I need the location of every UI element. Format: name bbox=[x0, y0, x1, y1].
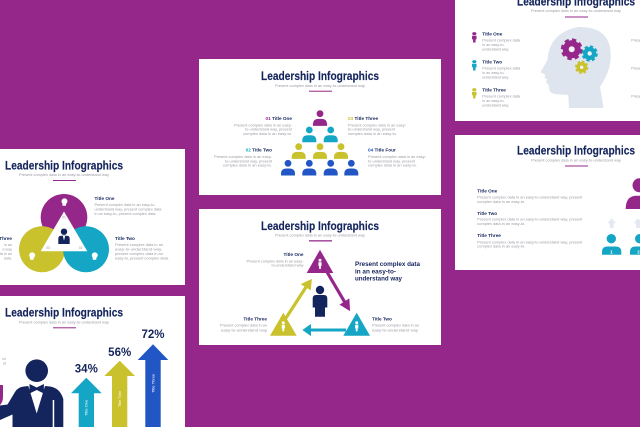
text: title three: ta in an bbox=[0, 252, 12, 256]
arrow: 72% bbox=[138, 329, 168, 427]
text: title two bbox=[115, 236, 169, 260]
subtitle: Present complex data in an easy-to-understand way bbox=[531, 158, 621, 162]
text: title three bbox=[0, 236, 12, 260]
text fragment bbox=[2, 357, 6, 366]
arrow: teal bbox=[305, 327, 346, 333]
text: title two: to-understand way, present bbox=[225, 159, 272, 163]
icon: teal gear bbox=[583, 46, 597, 60]
heading: Leadership Infographics bbox=[261, 219, 379, 233]
arrow: 34%: Title One bbox=[84, 399, 89, 416]
subtitle: Present complex data in an easy-to-understand way bbox=[275, 234, 365, 238]
text: title one: Present complex data in an easy-to-understand way, present bbox=[477, 195, 582, 199]
text: title three: complex data in an easy-to. bbox=[348, 132, 397, 136]
text: title three: Title Three bbox=[477, 233, 501, 238]
title rule bbox=[309, 240, 332, 242]
subtitle: Present complex data in an easy-to-understand way bbox=[19, 320, 109, 324]
icon: teal person one bbox=[602, 234, 621, 255]
icon: head silhouette bbox=[541, 27, 611, 108]
panel: triangle cycle bbox=[199, 209, 441, 345]
icon: pale arrows bbox=[607, 218, 640, 228]
text: title two: easy-to, present complex data. bbox=[115, 256, 169, 260]
icon: teal person one: 1 bbox=[610, 249, 613, 254]
item: title one: in an easy-to- bbox=[482, 43, 505, 47]
text: title one: Present complex data in an easy- bbox=[246, 259, 304, 263]
text: title four: to-understand way, present bbox=[368, 159, 415, 163]
callout bbox=[355, 261, 421, 283]
text: title three: complex data in an easy-to. bbox=[477, 245, 525, 249]
arrow: 72%: Title Three bbox=[150, 373, 155, 393]
item: title one: Present complex data bbox=[482, 39, 521, 43]
icon: manager bbox=[58, 228, 70, 244]
title rule bbox=[309, 91, 332, 92]
text: title one: Title One bbox=[284, 252, 304, 257]
text: title one bbox=[94, 196, 162, 216]
text: title three bbox=[477, 233, 582, 249]
text: title three: data. bbox=[4, 256, 12, 260]
venn circles: 01 bbox=[62, 216, 66, 220]
title rule bbox=[565, 166, 588, 167]
heading: Leadership Infographics bbox=[261, 69, 379, 83]
triangle: teal bbox=[343, 313, 370, 336]
text fragment: ch bbox=[2, 357, 6, 361]
text: title one: complex data in an easy-to. bbox=[477, 200, 525, 204]
item: title two: in an easy-to- bbox=[482, 71, 505, 75]
panel: hierarchy list bbox=[455, 135, 640, 270]
panel: percentage arrows bbox=[0, 296, 185, 427]
item: title three: understand way. bbox=[482, 104, 509, 108]
text: title one: in an easy-to, present complex data. bbox=[94, 212, 156, 216]
text: title two: Title Two bbox=[477, 211, 497, 216]
text: title two: present complex data in an bbox=[115, 252, 163, 256]
icon: yellow gear bbox=[576, 62, 588, 73]
text: title two: Present complex data in an easy-to-understand way, present bbox=[477, 218, 582, 222]
item: title two: Present complex data bbox=[482, 67, 521, 71]
icon: purple gear bbox=[562, 40, 581, 59]
text: title four bbox=[368, 148, 427, 168]
subtitle: Present complex data in an easy-to-understand way bbox=[531, 9, 621, 13]
arrow: 56%: 56% bbox=[108, 347, 131, 359]
text: title one bbox=[477, 188, 582, 204]
callout: understand way bbox=[355, 276, 403, 283]
icon: central person bbox=[313, 286, 327, 317]
text: title two: easy-to-understand way, bbox=[115, 248, 162, 252]
text: title three bbox=[348, 116, 407, 136]
text: title one: Present complex data in an easy- bbox=[234, 123, 293, 127]
text: title two: complex data in an easy-to. bbox=[477, 222, 525, 226]
icon: man in tuxedo bbox=[0, 359, 63, 427]
text: title three: Present complex data in an bbox=[220, 324, 267, 328]
arrow: yellow bbox=[286, 282, 310, 318]
arrow: purple bbox=[327, 272, 348, 308]
text: title three: Title Three bbox=[243, 316, 267, 321]
text: title one bbox=[246, 252, 304, 268]
text: title two bbox=[372, 316, 419, 332]
arrow: 56% bbox=[104, 347, 135, 427]
item: title two: understand way. bbox=[482, 76, 509, 80]
text: title three bbox=[220, 316, 267, 332]
triangle: purple bbox=[307, 250, 333, 273]
text: title two: Present complex data in an easy- bbox=[214, 155, 273, 159]
text: title four: complex data in an easy-to. bbox=[368, 164, 417, 168]
text: title one: complex data in an easy-to. bbox=[243, 132, 292, 136]
item: title three: Present complex data bbox=[482, 95, 521, 99]
arrow: 34%: 34% bbox=[75, 364, 98, 376]
item: title three: Title Three bbox=[482, 88, 506, 93]
icon: glass held by man bbox=[0, 385, 3, 405]
panel: head with gears bbox=[455, 0, 640, 121]
text: title two: complex data in an easy-to. bbox=[223, 164, 272, 168]
venn circles bbox=[19, 194, 109, 272]
callout: Present complex data bbox=[355, 261, 421, 268]
text: title one: to-understand way, present bbox=[245, 128, 292, 132]
text: title two: 02 Title Two bbox=[246, 148, 272, 152]
heading: Leadership Infographics bbox=[5, 305, 123, 319]
icon: purple leader bbox=[626, 178, 640, 209]
subtitle: Present complex data in an easy-to-understand way bbox=[19, 173, 109, 177]
title rule bbox=[53, 180, 76, 181]
title rule bbox=[565, 16, 588, 18]
item: title two: Title Two bbox=[482, 60, 502, 65]
arrow: 72%: 72% bbox=[141, 329, 165, 341]
text: title two bbox=[477, 211, 582, 226]
text: title three: 03 Title Three bbox=[348, 116, 379, 121]
text: title three: easy-to-understand way bbox=[221, 328, 267, 332]
panel: pyramid of people bbox=[199, 59, 441, 195]
item: title two bbox=[472, 60, 521, 80]
item: title one bbox=[472, 32, 521, 51]
callout: in an easy-to- bbox=[355, 268, 396, 276]
text: title two: Title Two bbox=[372, 316, 392, 321]
venn circles: 02 bbox=[79, 246, 83, 250]
heading: Leadership Infographics bbox=[5, 158, 123, 172]
text: title three: in an bbox=[4, 243, 12, 247]
item: title one: understand way. bbox=[482, 47, 509, 51]
text: title one: understand way, present complex data bbox=[94, 208, 162, 212]
text: title one: Title One bbox=[94, 196, 115, 201]
text fragment: ot bbox=[3, 362, 6, 366]
text: title two: Present complex data in an bbox=[115, 243, 163, 247]
text: title three: d way bbox=[2, 248, 12, 252]
text: title three: to-understand way, present bbox=[348, 128, 395, 132]
text fragments: right column bbox=[631, 39, 640, 99]
arrow: 34% bbox=[71, 364, 102, 427]
text: title one: to-understand way bbox=[272, 264, 304, 268]
arrow: 56%: Title Two bbox=[117, 390, 122, 407]
icon: teal person two bbox=[630, 234, 640, 255]
text: title three: Present complex data in an easy-to-understand way, present bbox=[477, 240, 582, 244]
panel: venn diagram bbox=[0, 149, 185, 285]
text: title four: 04 Title Four bbox=[368, 148, 396, 152]
text: title three: Present complex data in an easy- bbox=[348, 123, 407, 127]
text: title two bbox=[214, 148, 273, 168]
subtitle: Present complex data in an easy-to-understand way bbox=[275, 84, 365, 88]
text: title two: Title Two bbox=[115, 236, 135, 241]
item: title one: Title One bbox=[482, 32, 503, 37]
item: title three bbox=[472, 88, 521, 108]
text: title two: Present complex data in an bbox=[372, 324, 419, 328]
triangle: yellow bbox=[270, 313, 297, 336]
text: title one: Title One bbox=[477, 188, 498, 193]
text: title four: Present complex data in an easy- bbox=[368, 155, 427, 159]
text: title two: easy-to-understand way bbox=[372, 328, 418, 332]
item: title three: in an easy-to- bbox=[482, 99, 505, 103]
venn circles: 03 bbox=[46, 246, 50, 250]
people pyramid bbox=[281, 110, 358, 176]
title rule bbox=[53, 327, 76, 328]
text: title one bbox=[234, 116, 293, 136]
text: title one: Present complex data in an easy-to- bbox=[94, 203, 156, 207]
text: title one: 01 Title One bbox=[266, 116, 292, 121]
icon: teal person two: 2 bbox=[637, 249, 640, 254]
